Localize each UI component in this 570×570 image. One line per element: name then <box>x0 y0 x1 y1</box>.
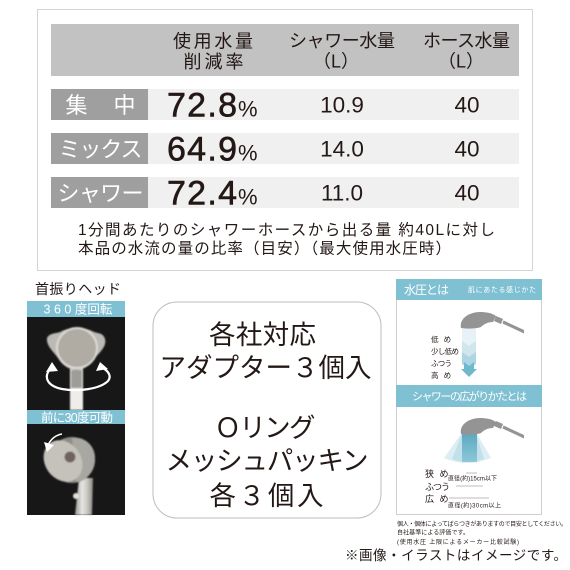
disclaimer notes: (使用水圧 上限によるメーカー比較試験) <box>397 538 519 546</box>
table footnote: 本品の水流の量の比率（目安）（最大使用水圧時） <box>78 240 451 258</box>
row: 集中: % <box>238 97 258 122</box>
caption: 30 degree tilt: 前に30度可動 <box>41 410 113 425</box>
icon: tilt arrow <box>44 434 62 452</box>
spread illustration <box>444 418 524 463</box>
row: シャワー <box>51 175 519 213</box>
pressure illustration: 少し低め <box>431 346 459 356</box>
row: ミックス: % <box>238 141 258 166</box>
row: シャワー: シャワー <box>58 181 144 206</box>
disclaimer notes: 個人・個体によってばらつきがありますので目安としてください。 <box>397 520 567 528</box>
water pressure header <box>396 279 542 300</box>
spread labels <box>425 468 501 510</box>
icon: shower head <box>461 418 524 438</box>
table header row <box>51 24 519 76</box>
spread labels: 広 め <box>425 494 450 504</box>
pressure illustration <box>431 312 524 380</box>
panel: included accessories: メッシュパッキン <box>166 446 368 476</box>
table header row: シャワー水量 <box>289 31 395 51</box>
icon: rotation arrows <box>46 362 110 390</box>
row: ミックス <box>51 131 519 169</box>
caption: 360 degrees <box>27 301 125 317</box>
disclaimer notes <box>397 520 567 546</box>
row: ミックス: ミックス <box>58 137 142 162</box>
row: 集中: 72.8 <box>167 87 237 125</box>
table footnote: 1分間あたりのシャワーホースから出る量 約40Lに対し <box>78 221 495 239</box>
pressure illustration: ふつう <box>431 359 452 368</box>
spread labels: 直径(約)15cm以下 <box>448 474 497 482</box>
row: 集中: 集 中 <box>66 93 136 118</box>
photo: tilting head <box>27 424 125 515</box>
spread labels: 狭 め <box>425 468 450 479</box>
table header row: （L） <box>438 52 484 72</box>
spray spread header <box>396 385 542 407</box>
icon: shower head <box>461 312 524 334</box>
panel: included accessories <box>153 302 381 518</box>
caption: 30 degree tilt <box>27 410 125 425</box>
row: シャワー: % <box>238 185 258 210</box>
row: シャワー: 11.0 <box>321 181 363 206</box>
panel: water pressure and spray spread <box>396 279 542 514</box>
row: シャワー: 40 <box>454 181 480 206</box>
table footnote <box>78 221 495 258</box>
row: ミックス: 14.0 <box>320 137 364 162</box>
table header row: 使用水量 <box>173 32 253 52</box>
row: 集中 <box>51 87 519 125</box>
row: 集中: 40 <box>454 93 480 118</box>
panel: water usage table <box>38 10 532 270</box>
water pressure header: 水圧とは <box>404 283 449 297</box>
spray spread header: シャワーの広がりかたとは <box>412 389 527 403</box>
panel: included accessories: 各３個入 <box>210 481 324 511</box>
pressure illustration: 低 め <box>431 334 453 344</box>
table header row: （L） <box>313 52 359 72</box>
table header row: ホース水量 <box>423 31 510 51</box>
disclaimer notes: 自社基準による評価です。 <box>397 528 469 536</box>
panel: included accessories: 各社対応 <box>209 320 316 350</box>
pressure illustration: 高 め <box>431 370 453 380</box>
image disclaimer: ※画像・イラストはイメージです。 <box>345 548 567 563</box>
row: ミックス: 64.9 <box>167 131 237 169</box>
caption: 360 degrees: 360度回転 <box>44 302 113 316</box>
panel: included accessories: アダプター３個入 <box>160 353 372 383</box>
photo: rotating head <box>27 317 125 410</box>
panel: swivel head <box>27 281 125 515</box>
row: 集中: 10.9 <box>320 93 364 118</box>
spread labels: 直径(約)30cm以上 <box>448 502 501 510</box>
panel: included accessories: Ｏリング <box>214 413 316 443</box>
table header row: 削減率 <box>184 52 244 72</box>
spread labels: ふつう <box>425 482 450 492</box>
water pressure header: 肌にあたる感じかた <box>468 285 536 294</box>
heading: 首振りヘッド <box>35 281 121 297</box>
icon: pressure arrow <box>461 329 477 377</box>
row: ミックス: 40 <box>454 137 480 162</box>
row: シャワー: 72.4 <box>167 175 237 213</box>
